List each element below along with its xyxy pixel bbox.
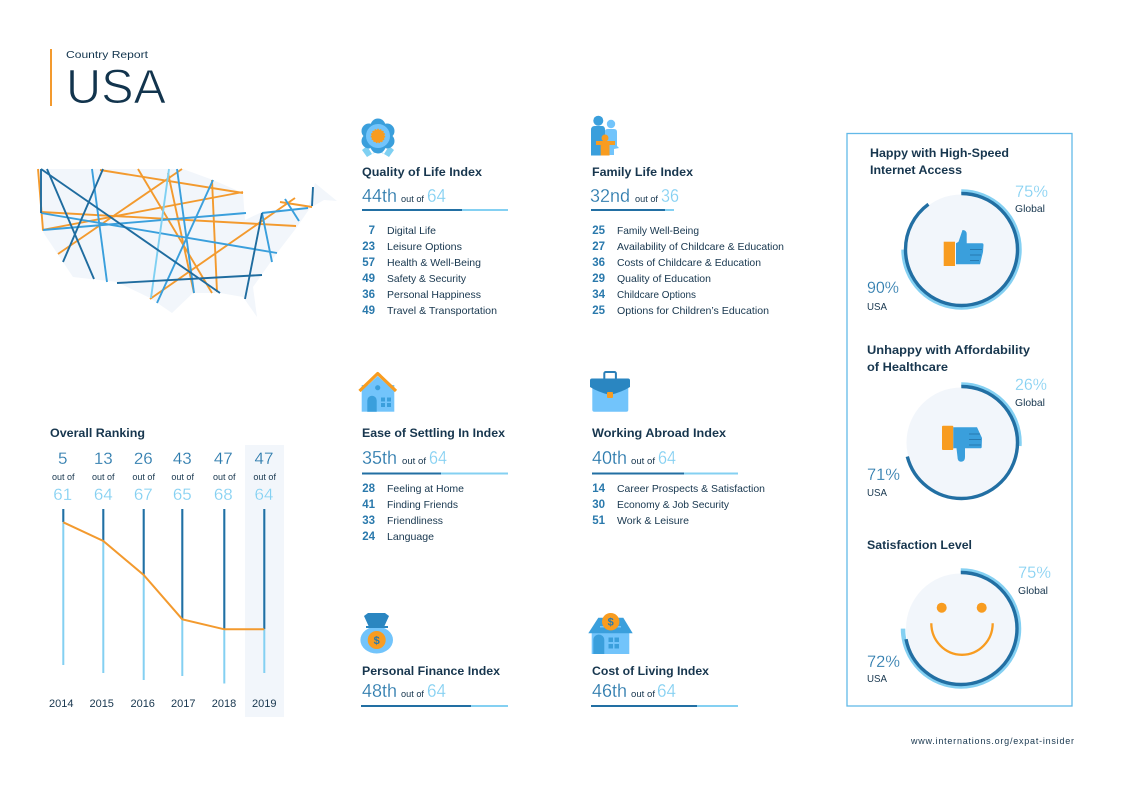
panel: Working Abroad Index: Economy & Job Security [617, 499, 730, 511]
panel: Family Life Index: Family Well-Being [617, 225, 699, 237]
icon: rosette [362, 118, 394, 157]
gauge: healthcare affordability: Global [1015, 397, 1045, 409]
gauge: satisfaction level: USA [867, 673, 887, 685]
gauge: healthcare affordability: 71% [867, 465, 900, 484]
gauge: satisfaction level: 72% [867, 652, 900, 671]
panel: Working Abroad Index: 64 [658, 448, 676, 468]
gauge: internet access: Global [1015, 203, 1045, 215]
panel: Family Life Index: Costs of Childcare & Education [617, 257, 761, 269]
panel: Quality of Life Index: 49 [362, 273, 375, 285]
panel: Quality of Life Index: 49 [362, 305, 375, 317]
panel: Working Abroad Index: 14 [592, 483, 606, 495]
gauge: internet access: USA [867, 301, 887, 313]
panel: Working Abroad Index: Working Abroad Index [592, 426, 726, 440]
labels: years: 2019 [252, 698, 277, 710]
labels: rank numbers: 43 [173, 449, 192, 468]
labels: years: 2016 [130, 698, 155, 710]
panel: Quality of Life Index: Travel & Transportation [387, 305, 497, 317]
panel: Family Life Index: Availability of Childcare & Education [617, 241, 784, 253]
labels: rank numbers: 47 [214, 449, 233, 468]
panel: Quality of Life Index: 36 [362, 289, 375, 301]
panel: Working Abroad Index: 30 [592, 499, 605, 511]
labels: rank numbers: 64 [94, 485, 113, 504]
icon: house [360, 374, 396, 412]
panel: Ease of Settling In Index: 33 [362, 515, 375, 527]
gauge: satisfaction level [867, 538, 1051, 686]
panel: Cost of Living Index: 46th [592, 681, 627, 701]
labels: rank numbers: 61 [53, 485, 72, 504]
panel: Ease of Settling In Index [362, 426, 508, 543]
labels: rank numbers: 5 [58, 449, 67, 468]
panel: Quality of Life Index [362, 165, 508, 317]
panel: Cost of Living Index: 64 [657, 681, 676, 701]
panel: Cost of Living Index: Cost of Living Index [592, 664, 709, 678]
panel: Quality of Life Index: Safety & Security [387, 273, 467, 285]
panel: Ease of Settling In Index: Friendliness [387, 515, 443, 527]
panel: Quality of Life Index: 44th [362, 186, 397, 206]
panel: Working Abroad Index: Career Prospects & Satisfaction [617, 483, 765, 495]
panel: Family Life Index [590, 165, 784, 317]
panel: Family Life Index: out of [635, 194, 658, 205]
gauge: internet access: Internet Access [870, 163, 962, 177]
icon: house with coin: $ [608, 617, 614, 629]
panel: Family Life Index: 25 [592, 225, 606, 237]
gauge: satisfaction level: Satisfaction Level [867, 538, 972, 552]
heading: overall ranking: Overall Ranking [50, 426, 145, 440]
labels: years: 2015 [89, 698, 114, 710]
panel: Quality of Life Index: Personal Happiness [387, 289, 481, 301]
panel: Family Life Index: 32nd [590, 186, 630, 206]
panel: Family Life Index: Quality of Education [617, 273, 711, 285]
panel: Family Life Index: 36 [661, 186, 679, 206]
panel: Quality of Life Index: 23 [362, 241, 375, 253]
labels: years: 2014 [49, 698, 74, 710]
panel: Working Abroad Index [592, 426, 765, 527]
icon: family [591, 116, 619, 156]
panel: Family Life Index: 29 [592, 273, 605, 285]
panel: Quality of Life Index: Leisure Options [387, 241, 462, 253]
panel: Personal Finance Index: Personal Finance Index [362, 664, 500, 678]
labels: rank numbers [52, 449, 276, 504]
gauge: internet access: 75% [1015, 182, 1048, 201]
gauge: healthcare affordability [867, 343, 1047, 500]
labels: years: 2018 [212, 698, 236, 710]
panel: Ease of Settling In Index: 41 [362, 499, 376, 511]
chart: ranking by year [63, 509, 264, 684]
panel: Quality of Life Index: 7 [369, 225, 375, 237]
panel: Quality of Life Index: out of [401, 194, 424, 205]
panel: Family Life Index: Childcare Options [617, 289, 696, 301]
panel: Ease of Settling In Index: Feeling at Home [387, 483, 464, 495]
title block: Country Report [66, 49, 148, 61]
source url: www.internations.org/expat-insider [910, 736, 1074, 746]
gauge: healthcare affordability: USA [867, 487, 887, 499]
panel: Working Abroad Index: 51 [592, 515, 606, 527]
panel: Quality of Life Index: Health & Well-Being [387, 257, 481, 269]
title block: USA [66, 61, 166, 114]
panel: overall ranking [49, 426, 284, 717]
gauge: healthcare affordability: Unhappy with Affordability [867, 343, 1030, 357]
gauge: internet access [867, 146, 1048, 313]
panel: Working Abroad Index: Work & Leisure [617, 515, 689, 527]
labels: rank numbers: out of [171, 472, 194, 482]
panel: survey results [847, 134, 1072, 706]
gauge: satisfaction level: 75% [1018, 563, 1051, 582]
panel: Cost of Living Index: out of [631, 689, 655, 700]
icon: money bag [360, 613, 393, 654]
panel: Personal Finance Index [361, 664, 508, 707]
panel: Personal Finance Index: 64 [427, 681, 446, 701]
labels: rank numbers: out of [92, 472, 115, 482]
panel: Ease of Settling In Index: out of [402, 456, 426, 467]
panel: Ease of Settling In Index: 28 [362, 483, 376, 495]
panel: Quality of Life Index: 64 [427, 186, 446, 206]
icon: money bag: $ [374, 635, 380, 647]
labels: rank numbers: 13 [94, 449, 113, 468]
panel: Personal Finance Index: out of [401, 689, 424, 700]
panel: Quality of Life Index: Quality of Life Index [362, 165, 482, 179]
labels: rank numbers: 67 [134, 485, 153, 504]
panel: Ease of Settling In Index: 35th [362, 448, 397, 468]
panel: Working Abroad Index: out of [631, 456, 655, 467]
labels: rank numbers: 47 [255, 449, 273, 468]
panel: Ease of Settling In Index: Finding Friends [387, 499, 458, 511]
icon: house with coin [588, 613, 633, 654]
labels: rank numbers: out of [52, 472, 75, 482]
map of USA with route lines [38, 169, 337, 317]
panel: Quality of Life Index: Digital Life [387, 225, 436, 237]
labels: years [49, 698, 277, 710]
panel: Family Life Index: 36 [592, 257, 605, 269]
labels: rank numbers: out of [213, 472, 236, 482]
gauge: internet access: 90% [867, 278, 899, 297]
title block [50, 49, 166, 114]
labels: rank numbers: 26 [134, 449, 153, 468]
gauge: internet access: Happy with High-Speed [870, 146, 1009, 160]
panel: Ease of Settling In Index: Language [387, 531, 434, 543]
panel: Cost of Living Index [591, 664, 738, 707]
gauge: satisfaction level: Global [1018, 585, 1048, 597]
panel: Quality of Life Index: 57 [362, 257, 375, 269]
labels: rank numbers: 64 [255, 485, 273, 504]
panel: Family Life Index: 27 [592, 241, 605, 253]
panel: Personal Finance Index: 48th [362, 681, 397, 701]
panel: Working Abroad Index: 40th [592, 448, 627, 468]
panel: Family Life Index: 25 [592, 305, 606, 317]
icon: briefcase [590, 372, 630, 412]
panel: Family Life Index: Options for Children’s Education [617, 305, 769, 317]
labels: rank numbers: 68 [214, 485, 233, 504]
gauge: healthcare affordability: 26% [1015, 375, 1047, 394]
panel: Family Life Index: 34 [592, 289, 606, 301]
gauge: healthcare affordability: of Healthcare [867, 360, 948, 374]
panel: Ease of Settling In Index: 24 [362, 531, 376, 543]
panel: Ease of Settling In Index: Ease of Settling In Index [362, 426, 505, 440]
panel: Family Life Index: Family Life Index [592, 165, 693, 179]
labels: rank numbers: out of [132, 472, 155, 482]
labels: rank numbers: 65 [173, 485, 192, 504]
panel: Ease of Settling In Index: 64 [429, 448, 447, 468]
labels: years: 2017 [171, 698, 196, 710]
labels: rank numbers: out of [253, 472, 276, 482]
